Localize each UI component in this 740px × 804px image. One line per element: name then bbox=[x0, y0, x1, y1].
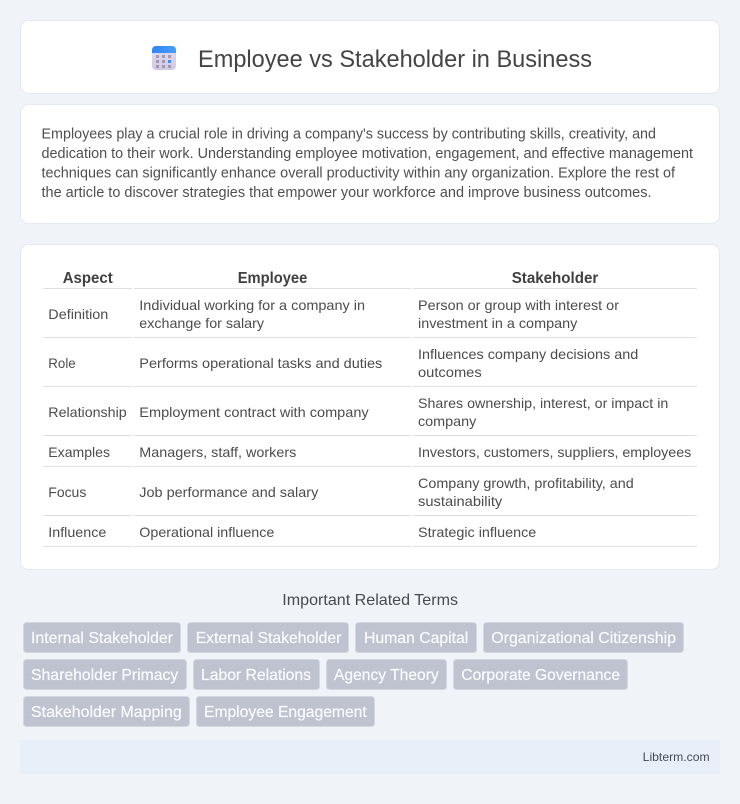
row: influence: Strategic influence bbox=[418, 524, 537, 540]
table header row bbox=[63, 270, 598, 287]
tag: Agency Theory bbox=[326, 660, 446, 690]
tag: Agency Theory: Agency Theory bbox=[334, 667, 439, 684]
intro paragraph: the article to discover strategies that empower your workforce and improve business outcomes. bbox=[42, 185, 652, 201]
tag: Shareholder Primacy: Shareholder Primacy bbox=[31, 667, 178, 684]
tag: Employee Engagement bbox=[196, 696, 374, 726]
panel: introduction bbox=[20, 104, 720, 224]
tag: Labor Relations bbox=[194, 660, 320, 690]
intro paragraph bbox=[42, 126, 693, 201]
row: focus bbox=[48, 475, 634, 509]
row: role bbox=[48, 346, 638, 380]
tag: Employee Engagement: Employee Engagement bbox=[204, 704, 367, 721]
row: relationship: Relationship bbox=[48, 404, 127, 420]
tag: External Stakeholder bbox=[188, 622, 348, 652]
row: role: outcomes bbox=[418, 364, 482, 380]
row: influence: Operational influence bbox=[139, 524, 275, 540]
row: relationship: company bbox=[418, 413, 476, 429]
row: focus: Job performance and salary bbox=[139, 484, 318, 500]
tag: Stakeholder Mapping: Stakeholder Mapping bbox=[31, 704, 182, 721]
row: relationship: Shares ownership, interest, or impact in bbox=[418, 395, 668, 411]
tag: External Stakeholder: External Stakeholder bbox=[196, 630, 342, 647]
tag: Corporate Governance bbox=[454, 660, 628, 690]
row: relationship: Employment contract with company bbox=[139, 404, 369, 420]
tag: Organizational Citizenship bbox=[484, 622, 684, 652]
tag: Corporate Governance: Corporate Governance bbox=[461, 667, 620, 684]
tag: Internal Stakeholder bbox=[24, 622, 180, 652]
row: focus: Focus bbox=[48, 484, 86, 500]
row: examples: Examples bbox=[48, 444, 110, 460]
panel: comparison table bbox=[20, 244, 720, 570]
table header row: Stakeholder bbox=[512, 270, 598, 287]
tag: Internal Stakeholder: Internal Stakeholder bbox=[31, 630, 174, 647]
tag: Shareholder Primacy bbox=[24, 660, 186, 690]
row: relationship bbox=[48, 395, 668, 429]
row: examples bbox=[48, 444, 691, 460]
row: definition: Person or group with interest or bbox=[418, 297, 619, 313]
intro paragraph: Employees play a crucial role in driving a company's success by contributing skills, creativity, and bbox=[42, 126, 656, 142]
intro paragraph: dedication to their work. Understanding employee motivation, engagement, and effective management bbox=[42, 146, 693, 162]
row: definition: Definition bbox=[48, 306, 108, 322]
row: influence: Influence bbox=[48, 524, 107, 540]
title: Employee vs Stakeholder in Business bbox=[198, 46, 592, 73]
row: examples: Managers, staff, workers bbox=[139, 444, 296, 460]
panel: title header bbox=[20, 20, 720, 94]
row: focus: Company growth, profitability, and bbox=[418, 475, 634, 491]
row: role: Performs operational tasks and duties bbox=[139, 355, 382, 371]
row: definition: exchange for salary bbox=[139, 315, 264, 331]
tag: Organizational Citizenship: Organizational Citizenship bbox=[491, 630, 676, 647]
table header row: Employee bbox=[238, 270, 307, 287]
row: definition bbox=[48, 297, 619, 331]
row: examples: Investors, customers, suppliers, employees bbox=[418, 444, 691, 460]
tag: Human Capital bbox=[356, 622, 476, 652]
intro paragraph: techniques can significantly enhance overall productivity within any organization. Explore the rest of bbox=[42, 166, 676, 182]
row: role: Influences company decisions and bbox=[418, 346, 638, 362]
footer: Libterm.com bbox=[643, 750, 710, 764]
icon: calendar bbox=[152, 46, 176, 70]
tag: Labor Relations: Labor Relations bbox=[201, 667, 311, 684]
row: definition: Individual working for a company in bbox=[139, 297, 365, 313]
heading: related terms: Important Related Terms bbox=[282, 592, 458, 609]
row: role: Role bbox=[48, 355, 76, 371]
tag: Stakeholder Mapping bbox=[24, 696, 190, 726]
row: influence bbox=[48, 524, 537, 540]
table header row: Aspect bbox=[63, 270, 113, 287]
footer bbox=[20, 740, 720, 774]
row: focus: sustainability bbox=[418, 493, 502, 509]
row: definition: investment in a company bbox=[418, 315, 577, 331]
tag: Human Capital: Human Capital bbox=[364, 630, 468, 647]
related term tags bbox=[24, 622, 684, 726]
